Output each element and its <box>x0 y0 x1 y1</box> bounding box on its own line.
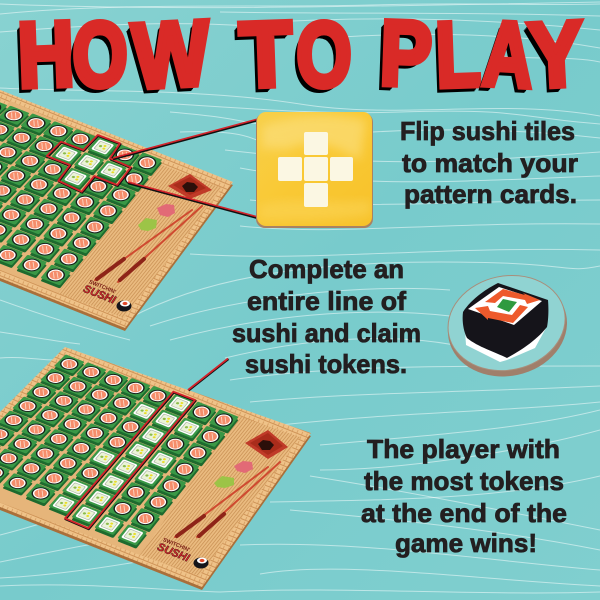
instruction text 3 <box>361 434 567 558</box>
board 2 logo sushi roll <box>194 558 208 568</box>
sushi token <box>438 265 576 387</box>
instruction text 2 <box>232 254 421 379</box>
board 2 wasabi <box>214 476 234 488</box>
instruction text 3: The player with <box>367 434 560 464</box>
token sushi roll <box>463 283 548 362</box>
title: W <box>130 2 212 108</box>
board 1 mat <box>0 78 233 331</box>
instruction text 1 <box>400 116 578 209</box>
instruction text 3: the most tokens <box>364 466 564 496</box>
title: Y <box>526 3 586 107</box>
board 2 line highlight <box>65 392 196 529</box>
board 1 logo sushi roll <box>116 300 132 312</box>
instruction text 1: Flip sushi tiles <box>400 116 575 146</box>
title: O <box>72 4 128 106</box>
board 1: top game board with cross pattern <box>0 78 233 331</box>
board 2 logo: SUSHI <box>155 541 192 565</box>
board 1 wasabi <box>138 218 157 231</box>
instruction text 3: at the end of the <box>361 498 567 528</box>
board 2 logo: SWITCHIN' <box>162 537 191 554</box>
board 1 soy sauce dish <box>168 174 212 199</box>
pattern card <box>256 112 373 228</box>
title: O <box>296 4 352 106</box>
board 1 logo: SWITCHIN' <box>88 279 117 296</box>
board 1 chopsticks <box>95 206 202 282</box>
title: T <box>238 3 294 107</box>
instruction text 1: to match your <box>402 148 578 178</box>
board 2 mat <box>0 347 311 590</box>
card plus pattern <box>278 132 353 207</box>
instruction text 2: sushi and claim <box>232 318 421 348</box>
title: P <box>378 2 434 106</box>
instruction text 2: sushi tokens. <box>245 349 407 379</box>
callout line from completed row <box>188 358 228 390</box>
board 2 soy sauce dish <box>245 430 288 459</box>
title <box>16 2 586 108</box>
token disc <box>438 265 576 387</box>
instruction text 3: game wins! <box>395 528 537 558</box>
instruction text 2: Complete an <box>249 254 404 284</box>
callout lines from cross to pattern card <box>113 119 258 218</box>
instruction text 1: pattern cards. <box>404 179 577 209</box>
title: A <box>480 3 536 107</box>
title: L <box>434 3 482 107</box>
instruction text 2: entire line of <box>247 286 406 316</box>
board 2 tile grid <box>0 354 240 549</box>
title: H <box>16 3 76 107</box>
board 1 cross highlight <box>47 135 131 192</box>
board 1 tile grid <box>0 98 164 289</box>
board 2 chopsticks <box>175 462 280 537</box>
board 2 pink ginger <box>234 461 253 473</box>
board 1 pink ginger <box>157 204 175 217</box>
board 2: bottom game board with completed line <box>0 347 311 590</box>
board 1 logo: SUSHI <box>81 283 118 307</box>
